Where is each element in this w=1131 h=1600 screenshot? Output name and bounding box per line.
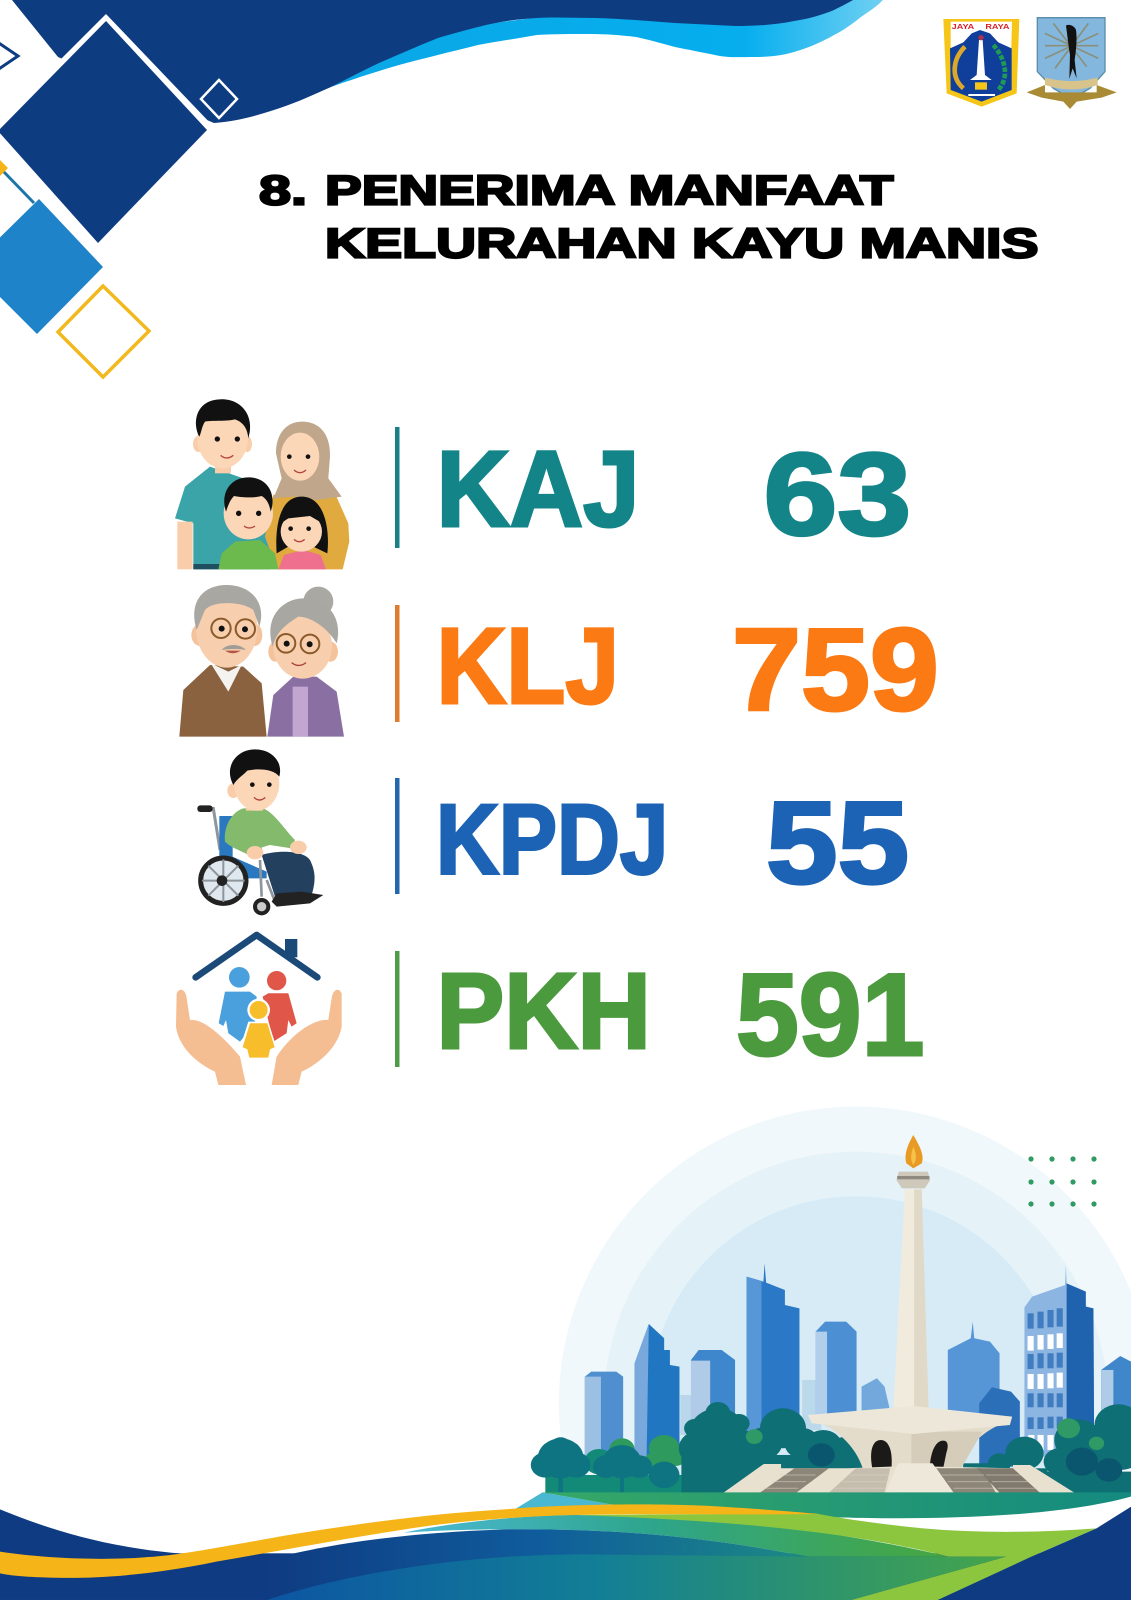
number: KAJ 63: 63 (764, 429, 911, 560)
title (259, 166, 1038, 267)
city skyline (585, 1263, 1131, 1467)
divider bar: PKH (395, 951, 400, 1067)
label: KLJ: KLJ (436, 605, 619, 726)
concentric sky circles (559, 1107, 1131, 1492)
divider bar: KLJ (395, 605, 400, 722)
icon: PKH family in house and hands (176, 935, 342, 1085)
icon: person in wheelchair (197, 749, 323, 913)
number: PKH 591: 591 (736, 950, 924, 1080)
logo: Kayu Manis emblem (1027, 18, 1117, 109)
divider bar: KPDJ (395, 778, 400, 894)
title: 8. (259, 166, 307, 214)
title: PENERIMA MANFAAT (325, 168, 894, 214)
label: KAJ: KAJ (436, 429, 640, 550)
title: KELURAHAN KAYU MANIS (325, 220, 1038, 267)
logo: Jaya Raya emblem (943, 19, 1019, 107)
bottom waves (0, 1492, 1131, 1600)
label: PKH: PKH (436, 951, 651, 1072)
trees (531, 1402, 1131, 1493)
icon: family (175, 399, 349, 569)
divider bar: KAJ (395, 427, 400, 548)
number: KLJ 759: 759 (732, 604, 939, 735)
decorative diamonds (0, 14, 237, 377)
National Monument (724, 1135, 1074, 1493)
logo: Jaya Raya emblem: RAYA (985, 23, 1010, 31)
icon: elderly couple (179, 585, 344, 737)
number: KPDJ 55: 55 (766, 778, 909, 909)
dot grid (1028, 1156, 1097, 1207)
top banner wave (12, 0, 883, 123)
logo: Jaya Raya emblem: JAYA (952, 23, 974, 31)
label: KPDJ: KPDJ (436, 784, 668, 895)
